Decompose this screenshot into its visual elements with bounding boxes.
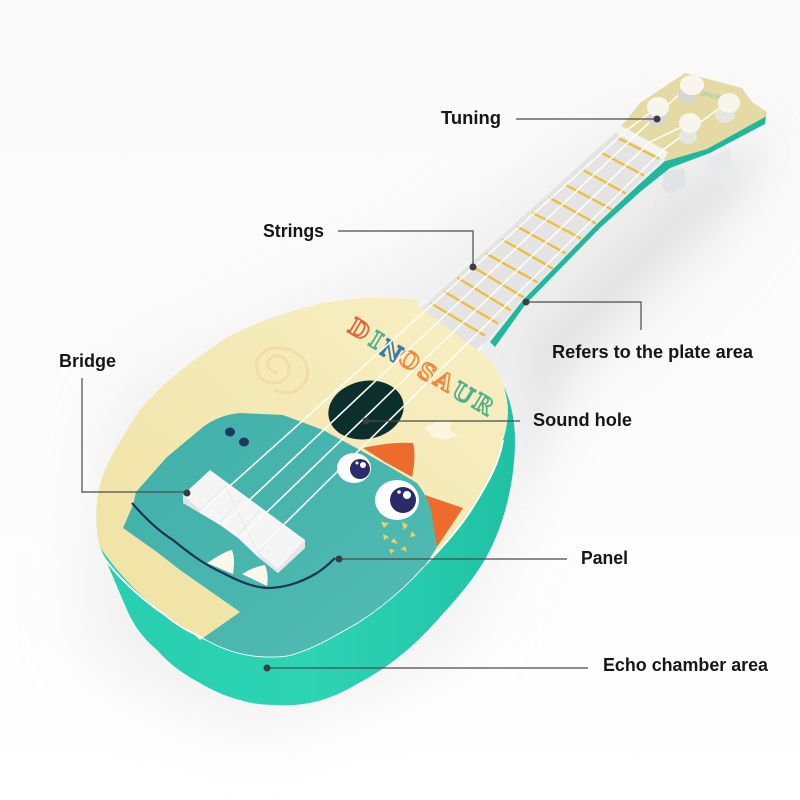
nut [616, 125, 668, 160]
tuning pegs [647, 75, 740, 144]
label: Strings: Strings [263, 221, 324, 241]
white rim line [103, 440, 503, 657]
nostrils [225, 428, 249, 446]
label: Sound hole [362, 410, 632, 430]
DINOSAUR lettering [343, 313, 499, 422]
teeth [207, 550, 268, 586]
cloud decoration [425, 420, 458, 440]
eye: left [337, 453, 371, 483]
body side green [100, 380, 515, 705]
label: Echo chamber area: Echo chamber area [603, 655, 769, 675]
label: Sound hole: Sound hole [533, 410, 632, 430]
DINOSAUR lettering: A [428, 365, 459, 398]
label: Bridge [59, 351, 190, 496]
headstock [620, 73, 767, 161]
label: Panel [336, 548, 628, 568]
DINOSAUR lettering: R [468, 388, 499, 422]
frets [432, 138, 658, 335]
DINOSAUR lettering: S [413, 357, 441, 388]
label: Echo chamber area [264, 655, 769, 675]
DINOSAUR lettering: D [343, 313, 374, 346]
body top cream [96, 298, 508, 657]
label: Tuning: Tuning [441, 108, 501, 128]
label: Strings [263, 221, 476, 270]
label: Bridge: Bridge [59, 351, 116, 371]
strings [203, 85, 725, 548]
label: Panel: Panel [581, 548, 628, 568]
ukulele [96, 73, 767, 705]
DINOSAUR lettering: U [447, 377, 478, 410]
spikes [363, 443, 463, 547]
mouth [132, 503, 335, 588]
DINOSAUR lettering: O [393, 344, 424, 377]
neck edge green [490, 116, 766, 347]
sound hole [323, 374, 409, 446]
label: Tuning [441, 108, 660, 128]
eye: right [375, 480, 419, 520]
label: Refers to the plate area: Refers to the plate area [552, 342, 754, 362]
swirl decoration [256, 348, 308, 393]
freckles [381, 522, 416, 554]
headstock back pegs [662, 148, 732, 194]
background shadow [90, 120, 780, 730]
fretboard [417, 128, 667, 352]
dinosaur panel [123, 413, 437, 657]
DINOSAUR lettering: I [364, 326, 387, 355]
DINOSAUR lettering: N [375, 335, 407, 369]
bridge [183, 470, 305, 573]
label: Refers to the plate area [522, 298, 754, 362]
headstock lettering: DINOSAUR [700, 90, 737, 106]
